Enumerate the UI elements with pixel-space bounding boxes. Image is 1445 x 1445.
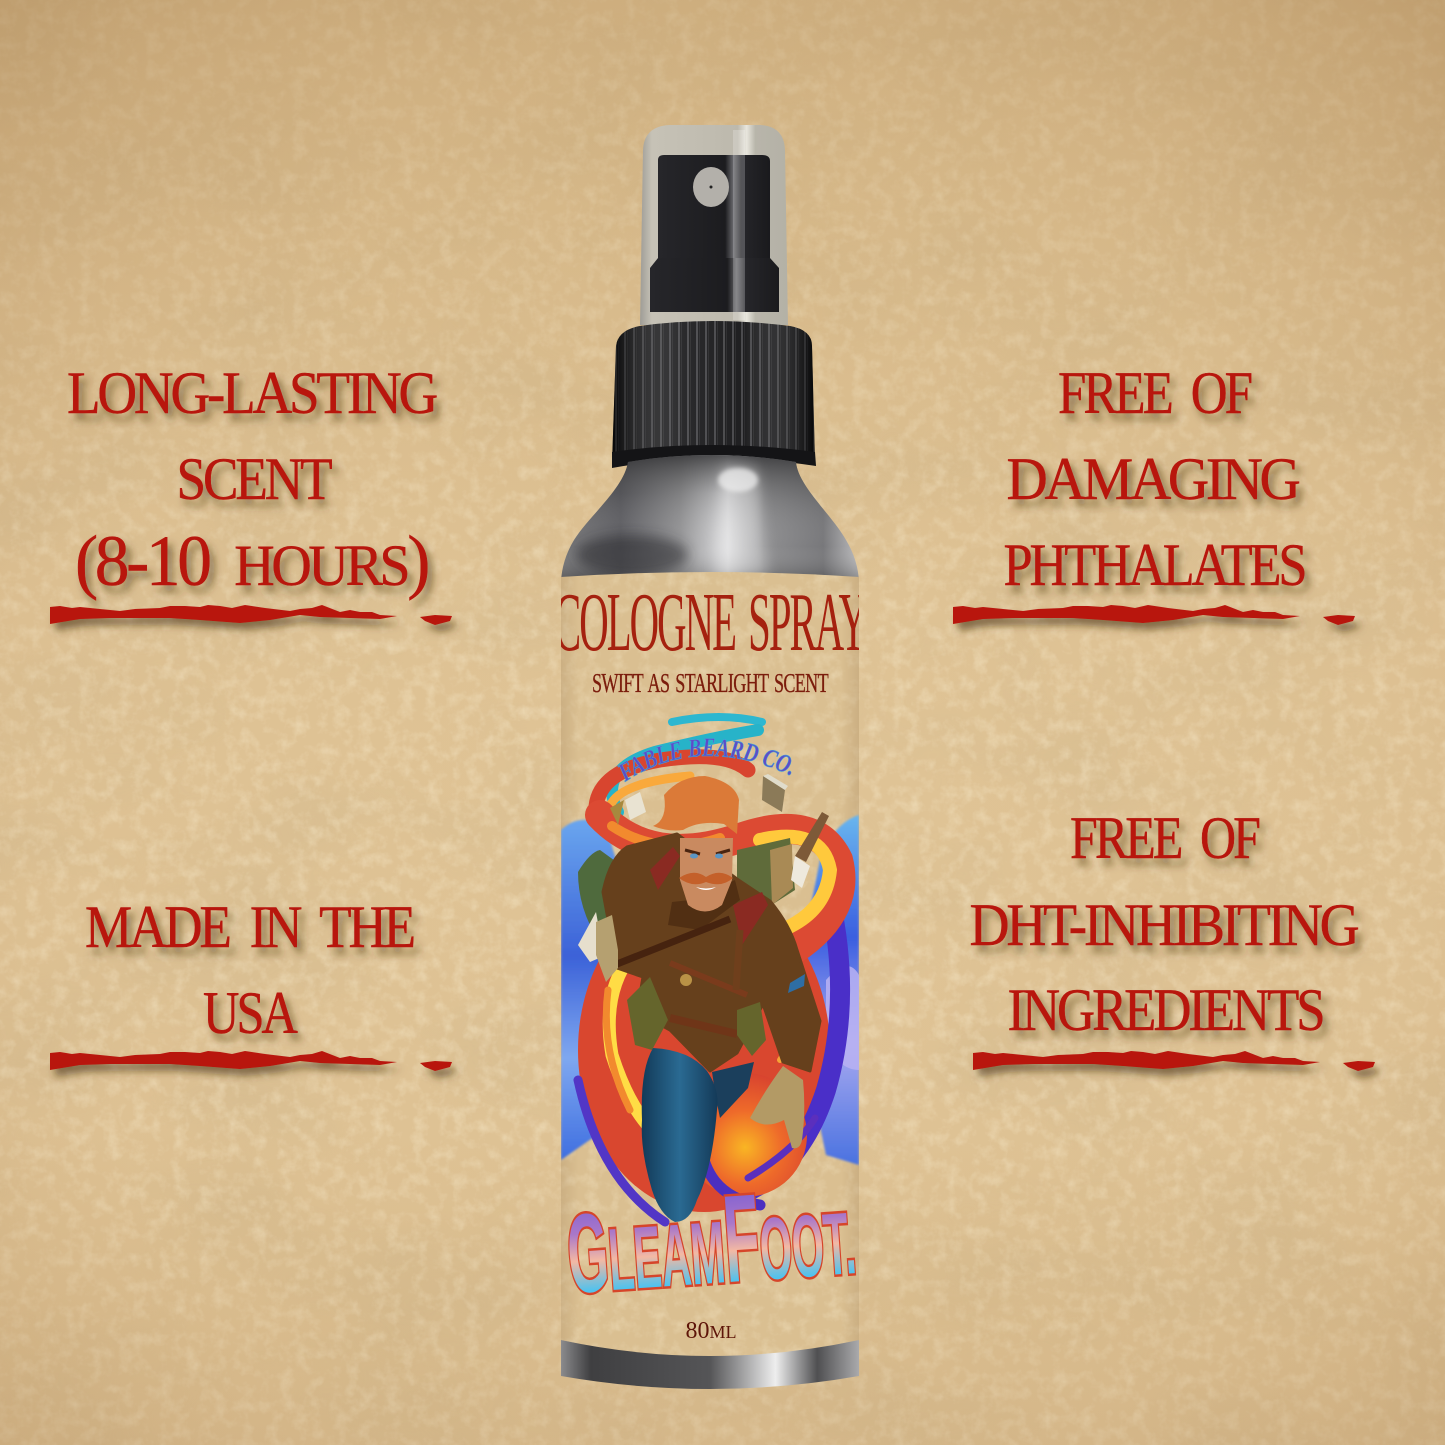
callout: free of dht-inhibiting ingredients: INGREDIENTS xyxy=(1008,977,1323,1043)
backpack and scroll xyxy=(737,812,829,906)
callout: made in the usa: MADE IN THE xyxy=(85,894,414,960)
hair xyxy=(653,776,739,834)
callout: made in the usa xyxy=(50,894,452,1071)
callout: long-lasting scent: SCENT xyxy=(176,446,332,512)
nozzle xyxy=(693,167,729,207)
callout: free of dht-inhibiting ingredients: DHT-INHIBITING xyxy=(970,892,1358,958)
right glove xyxy=(750,1066,804,1148)
callout: free of damaging phthalates: DAMAGING xyxy=(1006,446,1300,512)
callout: long-lasting scent: (8-10 HOURS) xyxy=(75,521,427,601)
callout: free of dht-inhibiting ingredients: FREE OF xyxy=(1070,805,1260,871)
brand script: FABLE BEARD CO. xyxy=(618,738,792,782)
callout: free of damaging phthalates: FREE OF xyxy=(1058,360,1252,426)
green satchel xyxy=(578,850,614,924)
aluminum shoulder xyxy=(561,455,859,582)
olive pouches xyxy=(627,977,766,1056)
kraft label xyxy=(561,572,859,1356)
filled vortex disc xyxy=(578,958,828,1212)
callout: made in the usa: USA xyxy=(203,980,298,1046)
aluminum base xyxy=(561,1330,859,1389)
blue ink wash xyxy=(561,815,859,1165)
callout: free of dht-inhibiting ingredients xyxy=(970,805,1375,1071)
front leg xyxy=(642,1048,718,1222)
callout: free of damaging phthalates xyxy=(953,360,1355,625)
parcels in flight xyxy=(610,774,788,825)
infographic canvas: COLOGNE SPRAY xyxy=(554,576,867,669)
product: spray bottle xyxy=(561,125,859,1389)
jacket xyxy=(603,834,820,1071)
head xyxy=(679,838,733,912)
volume: 80ML xyxy=(686,1318,736,1344)
clear overcap xyxy=(640,125,788,325)
scent name: SWIFT AS STARLIGHT SCENT xyxy=(592,668,829,698)
energy swirl xyxy=(578,717,840,1222)
GleamFoot logotype: GLEAMFOOT. xyxy=(563,1162,860,1320)
mustache xyxy=(679,873,733,884)
letter xyxy=(578,912,598,962)
callout: long-lasting scent: LONG-LASTING xyxy=(67,360,437,426)
callout: free of damaging phthalates: PHTHALATES xyxy=(1004,532,1305,598)
callout: long-lasting scent xyxy=(50,360,452,625)
ribbed black collar xyxy=(612,321,816,468)
illustration: running courier hero xyxy=(561,717,859,1222)
left glove xyxy=(596,915,618,982)
back leg xyxy=(712,1062,754,1118)
black spray head xyxy=(650,155,779,312)
